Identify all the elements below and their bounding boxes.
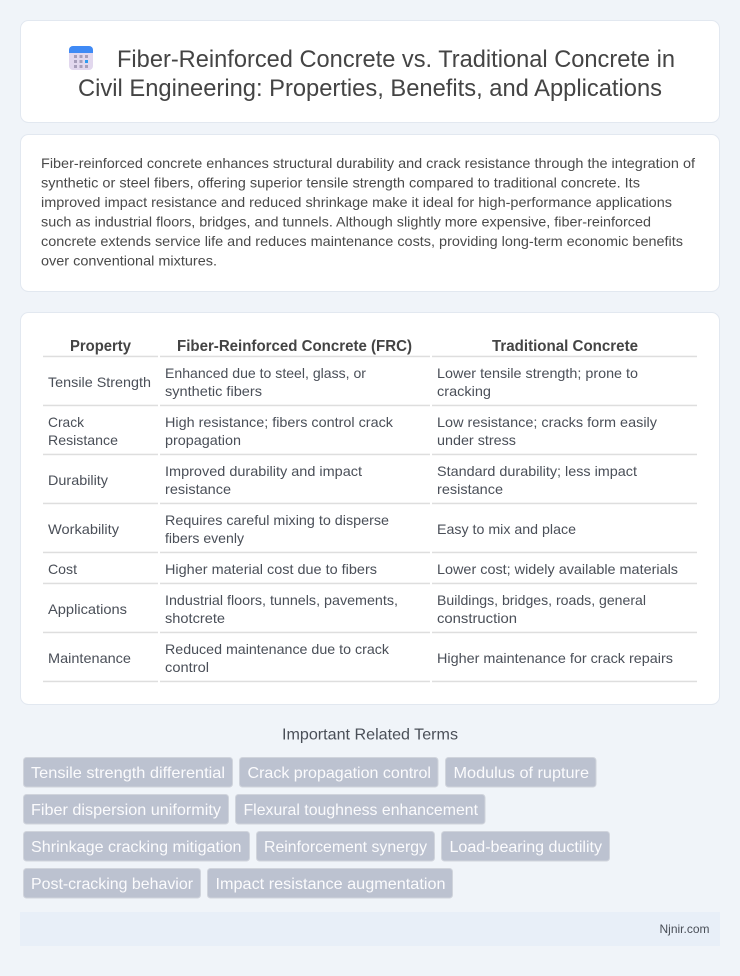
row: applications: Buildings, bridges, roads, general [437,592,646,608]
tag: crack propagation control: Crack propagation control [248,765,431,782]
summary paragraph: synthetic or steel fibers, offering superior tensile strength compared to traditional concrete. Its [41,174,640,190]
tag: reinforcement synergy: Reinforcement synergy [264,839,427,856]
tag: tensile strength differential [24,758,232,787]
summary paragraph: over conventional mixtures. [41,252,217,268]
row: crack resistance: Crack [48,414,85,430]
panel: summary [20,134,720,292]
tag: fiber dispersion uniformity [24,794,228,824]
summary paragraph [41,155,695,268]
panel: comparison table [20,312,720,704]
row: maintenance: Higher maintenance for crack repairs [437,650,673,666]
row: applications: construction [437,610,517,626]
row: durability [43,463,697,504]
row: maintenance: Reduced maintenance due to crack [165,641,390,657]
row: cost: Cost [48,561,77,577]
summary paragraph: Fiber-reinforced concrete enhances structural durability and crack resistance through the integration of [41,155,695,171]
table header: Traditional Concrete [492,338,638,355]
row: applications: Industrial floors, tunnels, pavements, [165,592,398,608]
row: durability: Durability [48,472,108,488]
tag: load-bearing ductility: Load-bearing ductility [450,839,602,856]
tag: tensile strength differential: Tensile strength differential [31,765,225,782]
summary paragraph: such as industrial floors, bridges, and tunnels. Although slightly more expensive, fiber-reinforced [41,214,651,230]
row: crack resistance: Resistance [48,432,118,448]
title: Fiber-Reinforced Concrete vs. Traditional Concrete in [117,46,675,73]
tag: modulus of rupture [446,758,596,787]
row: workability: fibers evenly [165,530,244,546]
footer: Njnir.com [660,922,710,936]
tag: shrinkage cracking mitigation: Shrinkage cracking mitigation [31,839,241,856]
row: durability: Standard durability; less impact [437,463,637,479]
row: tensile strength [43,365,697,406]
row: tensile strength: Tensile Strength [48,374,151,390]
row: crack resistance: under stress [437,432,516,448]
row: tensile strength: cracking [437,383,491,399]
row: applications: Applications [48,601,127,617]
row: crack resistance: High resistance; fibers control crack [165,414,394,430]
tag: fiber dispersion uniformity: Fiber dispersion uniformity [31,802,221,819]
footer [20,912,720,946]
row: cost: Lower cost; widely available materials [437,561,678,577]
row: workability: Workability [48,521,119,537]
tag: crack propagation control [240,758,438,787]
row: cost [43,561,697,584]
tag: flexural toughness enhancement: Flexural toughness enhancement [244,802,479,819]
panel: title card [20,20,720,122]
row: crack resistance: Low resistance; cracks form easily [437,414,657,430]
tag: shrinkage cracking mitigation [24,832,250,861]
row: applications: shotcrete [165,610,225,626]
tag: load-bearing ductility [442,832,610,861]
row: workability: Requires careful mixing to disperse [165,512,389,528]
related terms tags [24,758,610,898]
tag: reinforcement synergy [256,832,434,861]
row: crack resistance: propagation [165,432,241,448]
row: maintenance: control [165,659,209,675]
summary paragraph: concrete extends service life and reduces maintenance costs, providing long-term economic benefits [41,233,683,249]
row: crack resistance [43,414,697,455]
tag: flexural toughness enhancement [236,794,485,824]
row: applications [43,592,697,633]
row: durability: Improved durability and impact [165,463,362,479]
title: Civil Engineering: Properties, Benefits, and Applications [78,75,662,102]
row: maintenance: Maintenance [48,650,131,666]
row: workability [43,512,697,553]
summary paragraph: improved impact resistance and reduced shrinkage make it ideal for high-performance applications [41,194,672,210]
row: durability: resistance [165,481,231,497]
row: tensile strength: synthetic fibers [165,383,262,399]
tag: impact resistance augmentation: Impact resistance augmentation [216,876,446,893]
table header: Fiber-Reinforced Concrete (FRC) [177,338,412,355]
tag: modulus of rupture: Modulus of rupture [454,765,589,782]
tag: post-cracking behavior: Post-cracking behavior [31,876,194,893]
icon: calendar [69,46,93,70]
row: tensile strength: Enhanced due to steel, glass, or [165,365,366,381]
row: workability: Easy to mix and place [437,521,576,537]
tag: post-cracking behavior [24,868,200,898]
table header: Property [70,338,131,355]
title [78,46,675,102]
table header [43,338,697,357]
row: maintenance [43,641,697,682]
row: tensile strength: Lower tensile strength; prone to [437,365,638,381]
tag: impact resistance augmentation [208,868,452,898]
related terms heading: Important Related Terms [282,726,458,744]
row: cost: Higher material cost due to fibers [165,561,377,577]
row: durability: resistance [437,481,503,497]
